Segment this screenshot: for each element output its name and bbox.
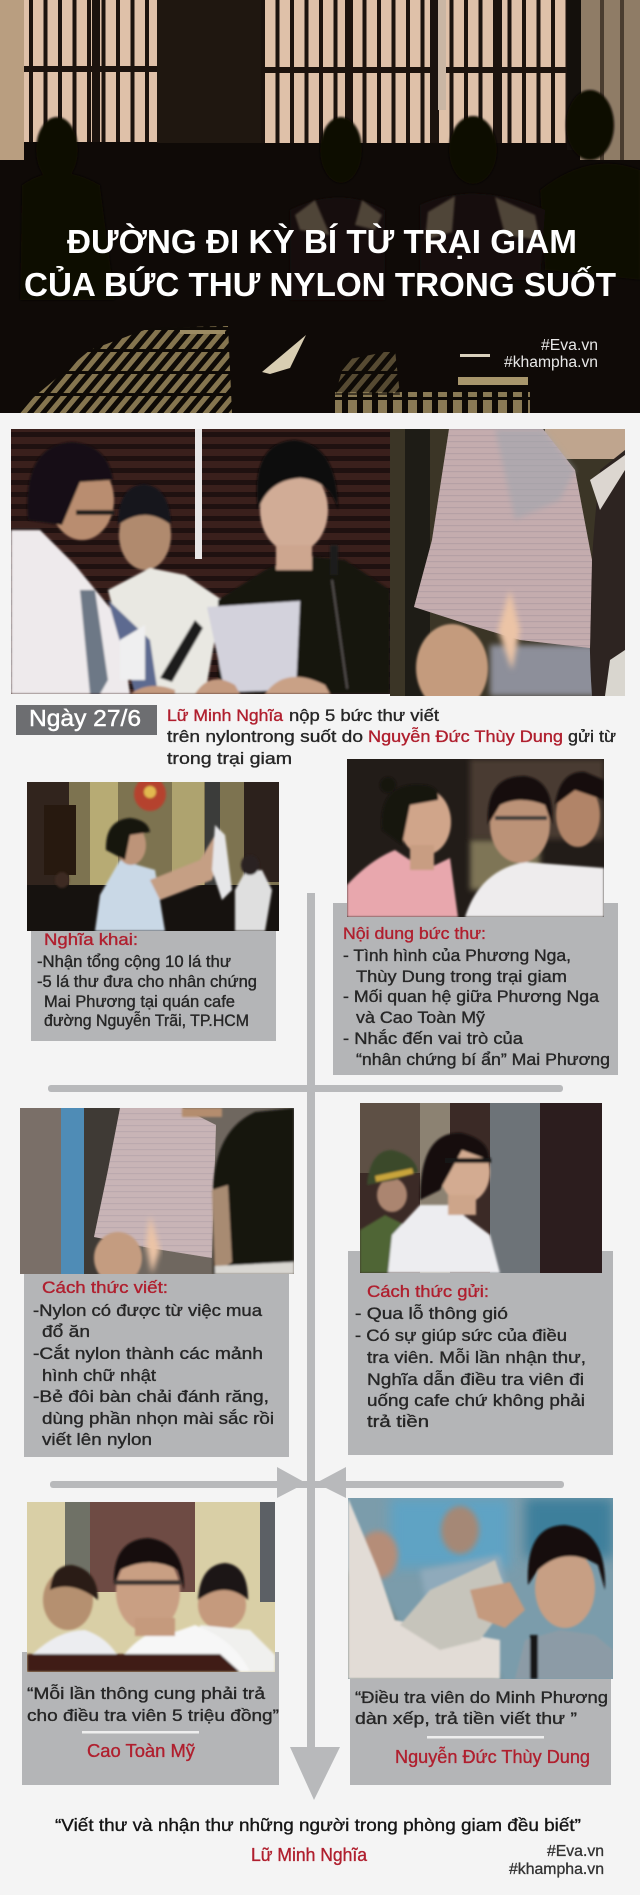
text: letter contents: Nội dung bức thư: [343,925,486,943]
panel: quote Nguyễn Đức Thùy Dung [348,1498,613,1785]
title: CỦA BỨC THƯ NYLON TRONG SUỐT [24,265,616,303]
text box background [22,1652,279,1785]
text: letter contents: “nhân chứng bí ẩn” Mai Phương [356,1051,610,1069]
summary text: Lữ Minh Nghĩa [167,707,284,725]
summary text: gửi từ [568,728,616,746]
date label [16,705,157,735]
summary text: Nguyễn Đức Thùy Dung [368,727,563,746]
text: Nghĩa khai: -Nhận tổng cộng 10 lá thư [37,953,231,971]
closing quote: “Viết thư và nhận thư những người trong phòng giam đều biết” [55,1815,581,1835]
quote text: “Mỗi lần thông cung phải trả [27,1684,266,1703]
timeline connector: vertical stem with horizontal bars and arrows [48,893,564,1800]
text: how the letter was sent [355,1283,586,1431]
watermark hashtags: #Eva.vn [541,337,598,354]
quote text: dàn xếp, trả tiền viết thư ” [355,1710,577,1728]
text: letter contents: - Mối quan hệ giữa Phương Nga [343,988,600,1006]
text: how the letter was written [33,1279,274,1449]
photo: man examining the nylon letter [20,1108,294,1284]
arrow: right-pointing bow-tie half [277,1467,306,1498]
hero photo: prisoners silhouetted under barred windows [0,0,640,413]
text: letter contents: - Tình hình của Phương Nga, [343,947,571,965]
photo: Phương Nga and Cao Toàn Mỹ [347,759,604,917]
text: how the letter was written: Cách thức viết: [42,1279,168,1297]
panel: Cách thức gửi [348,1103,613,1455]
text: letter contents: - Nhắc đến vai trò của [343,1029,524,1048]
text box background [333,903,618,1075]
text: how the letter was written: đổ ăn [42,1323,90,1341]
arrow: down arrowhead [290,1747,340,1800]
panel: Cách thức viết [20,1108,294,1457]
footer hashtags: #khampha.vn [509,1861,604,1878]
text: how the letter was sent: - Có sự giúp sức của điều [355,1327,567,1345]
photo: Thùy Dung in court with guard [360,1103,602,1273]
text: how the letter was written: -Bẻ đôi bàn chải đánh răng, [33,1388,269,1406]
panel: 27/6 evidence photos and summary [11,429,625,768]
text: how the letter was sent: trả tiền [367,1413,429,1431]
text: how the letter was written: hình chữ nhật [42,1367,156,1385]
watermark hashtags [504,337,598,371]
text box background [31,931,276,1041]
text: how the letter was written: dùng phần nhọn mài sắc rồi [42,1409,274,1428]
summary text: nộp 5 bức thư viết [289,707,439,725]
quote text [355,1689,608,1728]
footer hashtags [509,1843,604,1878]
arrow: left-pointing bow-tie half [316,1467,346,1498]
text: how the letter was sent: Nghĩa dẫn điều tra viên đi [367,1370,584,1389]
photo: Nghĩa holding up the letter in court [27,777,279,931]
text: Nghĩa khai: Mai Phương tại quán cafe [44,993,235,1011]
watermark hashtags: #khampha.vn [504,354,598,371]
text box background [350,1670,611,1785]
text: Nghĩa khai: đường Nguyễn Trãi, TP.HCM [44,1011,249,1030]
floor light pattern [15,326,232,413]
text: how the letter was sent: uống cafe chứ không phải [367,1392,585,1410]
text: letter contents [343,925,610,1069]
closing quote [55,1815,581,1865]
footer hashtags: #Eva.vn [547,1843,604,1860]
summary text: trong trại giam [167,750,292,768]
text: Nghĩa khai: -5 lá thư đưa cho nhân chứng [37,973,257,991]
text: how the letter was sent: - Qua lỗ thông gió [355,1304,508,1323]
date label: Ngày 27/6 [29,705,141,731]
panel: Nghĩa khai [27,777,279,1041]
text: Nghĩa khai [37,931,257,1030]
panel: quote Cao Toàn Mỹ [22,1502,279,1785]
photo: nylon letter held to the light [390,429,625,712]
summary text: trên nylontrong suốt do [167,728,363,746]
speaker name: Lữ Minh Nghĩa: Lữ Minh Nghĩa [251,1845,368,1865]
quote text [27,1684,279,1725]
text: how the letter was sent: Cách thức gửi: [367,1283,489,1301]
quote text: “Điều tra viên do Minh Phương [355,1689,608,1707]
speaker name: Cao Toàn Mỹ [87,1741,195,1761]
text: Nghĩa khai: Nghĩa khai: [44,931,138,949]
text: how the letter was written: -Cắt nylon thành các mảnh [33,1344,263,1363]
panel: Nội dung bức thư [333,759,618,1075]
panel: hero banner [0,0,640,413]
text: letter contents: Thùy Dung trong trại giam [356,968,567,986]
text: how the letter was written: viết lên nylon [42,1431,152,1449]
text: how the letter was sent: tra viên. Mỗi lần nhận thư, [367,1348,586,1367]
text box background [24,1274,289,1457]
title: ĐƯỜNG ĐI KỲ BÍ TỪ TRẠI GIAM [67,223,577,260]
title [24,223,616,303]
text: letter contents: và Cao Toàn Mỹ [356,1009,486,1027]
summary text [167,707,616,768]
speaker name: Nguyễn Đức Thùy Dung [395,1746,590,1767]
quote text: cho điều tra viên 5 triệu đồng” [27,1707,279,1725]
photo: Cao Toàn Mỹ smiling [27,1502,275,1672]
text: how the letter was written: -Nylon có được từ việc mua [33,1302,263,1320]
text box background [348,1251,613,1455]
photo: man examining plastic evidence [348,1498,613,1679]
photo: lawyer and Lữ Minh Nghĩa in court [11,429,390,694]
